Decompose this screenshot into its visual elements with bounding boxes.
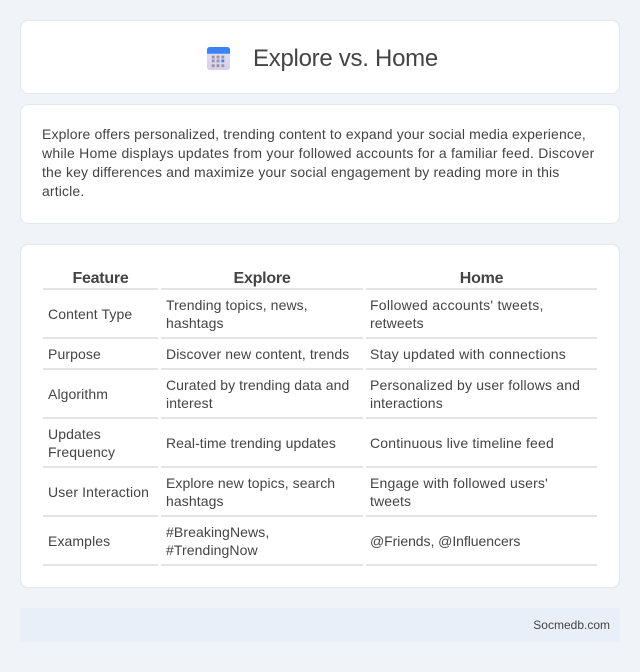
- table rows: hashtags: [166, 493, 224, 509]
- table rows: Followed accounts' tweets,: [370, 297, 544, 313]
- table rows: #BreakingNews,: [166, 524, 269, 540]
- title: Explore vs. Home: [253, 45, 438, 72]
- table rows: interactions: [370, 395, 443, 411]
- table rows: tweets: [370, 493, 411, 509]
- panel: intro text: [20, 104, 620, 224]
- table rows: User Interaction: [48, 484, 149, 500]
- table rows: Continuous live timeline feed: [370, 435, 554, 451]
- table rows: Algorithm: [48, 386, 108, 402]
- panel: intro text: article.: [42, 183, 84, 199]
- table rows: Real-time trending updates: [166, 435, 336, 451]
- table rows: interest: [166, 395, 213, 411]
- panel: comparison table: [20, 244, 620, 588]
- table header: Home: [460, 270, 503, 287]
- panel: intro text: while Home displays updates from your followed accounts for a familiar feed. Discover: [42, 145, 594, 161]
- table rows: Trending topics, news,: [166, 297, 308, 313]
- table rows: Curated by trending data and: [166, 377, 349, 393]
- table rows: Content Type: [48, 306, 132, 322]
- table rows: Frequency: [48, 444, 115, 460]
- table rows: retweets: [370, 315, 424, 331]
- table header: Feature: [72, 270, 129, 287]
- panel: intro text: the key differences and maximize your social engagement by reading more in this: [42, 164, 559, 180]
- footer text: Socmedb.com: [533, 618, 610, 632]
- table rows: @Friends, @Influencers: [370, 533, 520, 549]
- table rows: [43, 288, 597, 566]
- table rows: Examples: [48, 533, 110, 549]
- table header: [72, 270, 503, 287]
- table rows: #TrendingNow: [166, 542, 258, 558]
- table rows: Explore new topics, search: [166, 475, 335, 491]
- table rows: Personalized by user follows and: [370, 377, 580, 393]
- footer: [20, 608, 620, 642]
- table header: Explore: [234, 270, 290, 287]
- table rows: Stay updated with connections: [370, 346, 566, 362]
- table rows: Engage with followed users': [370, 475, 548, 491]
- panel: intro text: Explore offers personalized, trending content to expand your social media experience,: [42, 126, 586, 142]
- icon: calendar: [206, 47, 230, 70]
- table rows: Purpose: [48, 346, 101, 362]
- table rows: Discover new content, trends: [166, 346, 349, 362]
- table rows: hashtags: [166, 315, 224, 331]
- panel: title card: [20, 20, 620, 94]
- table rows: Updates: [48, 426, 101, 442]
